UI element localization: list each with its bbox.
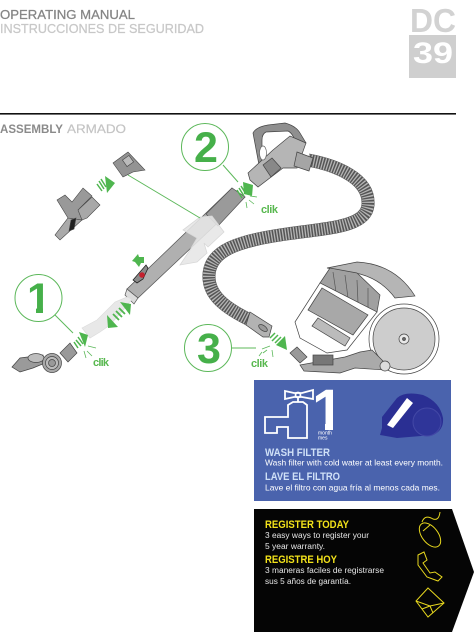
icon: phone: [418, 552, 442, 581]
hose end: [246, 312, 272, 337]
extension tube, translucent: [82, 297, 132, 338]
title: operating manual: [0, 8, 204, 36]
month label: month: [318, 430, 332, 436]
step badge 3: [184, 324, 232, 373]
register text: REGISTER TODAY: [265, 519, 350, 531]
step badge 1: 1: [27, 275, 51, 323]
wand clip, translucent: [180, 216, 224, 265]
handle: [248, 123, 313, 187]
register text: sus 5 años de garantía.: [265, 577, 351, 586]
clik labels: [93, 204, 279, 370]
wash filter text: LAVE EL FILTRO: [265, 471, 340, 483]
hose: [209, 160, 368, 321]
panel: register: [254, 509, 474, 632]
detached tool: [55, 188, 100, 240]
click marks: [84, 196, 273, 358]
wash filter text: Wash filter with cold water at least every month.: [265, 458, 443, 468]
vacuum rear arch: [327, 262, 415, 298]
model badge: DC 39: [409, 2, 456, 78]
wash filter text: Lave el filtro con agua fría al menos cada mes.: [265, 482, 440, 492]
heading: assembly: ASSEMBLY: [0, 122, 63, 136]
icon: mouse: [415, 512, 445, 551]
step badge 2: [182, 124, 228, 172]
floor tool: [12, 343, 77, 372]
clear bin: [295, 283, 377, 353]
model badge: DC 39: 39: [413, 37, 453, 70]
panel: wash filter: [254, 378, 451, 501]
step badge 1: [15, 274, 62, 323]
cyclone head: [320, 268, 380, 312]
heading: assembly: [0, 122, 126, 136]
arrow: step 3 click: [270, 333, 287, 350]
icon: vacuum with filter: [380, 394, 443, 438]
connector part: [113, 152, 145, 177]
green leader lines: [55, 165, 256, 348]
big number 1: 1: [312, 378, 344, 443]
clik labels: clik: [251, 358, 269, 370]
register text: 3 easy ways to register your: [265, 531, 369, 540]
model badge: DC 39: DC: [410, 2, 456, 39]
clik labels: clik: [93, 357, 110, 369]
clik labels: clik: [261, 204, 279, 216]
icon: tap: [265, 390, 313, 438]
wash filter text: WASH FILTER: [265, 447, 330, 459]
icon: envelope: [416, 588, 444, 617]
month label: mes: [318, 436, 328, 442]
heading: assembly: ARMADO: [67, 122, 126, 136]
step badge 3: 3: [197, 325, 221, 373]
title: operating manual: OPERATING MANUAL: [0, 8, 135, 22]
wheel: [369, 304, 439, 374]
base and front wheel: [300, 350, 385, 373]
arrow: step 2 click: [237, 182, 253, 198]
register text: 3 maneras faciles de registrarse: [265, 566, 385, 575]
arrow: extension two-way: [107, 302, 131, 328]
arrow: tool to connector: [97, 176, 115, 193]
arrow: catch up-down: [132, 254, 144, 267]
step badge 2: 2: [194, 124, 218, 172]
wand upper: [125, 188, 245, 304]
month label: [318, 430, 332, 442]
register text: REGISTRE HOY: [265, 554, 338, 566]
release catch, red: [133, 265, 148, 283]
vacuum cleaner: [290, 262, 439, 374]
arrow: step 1 click: [74, 332, 88, 348]
wash filter text: [265, 447, 443, 492]
title: operating manual: INSTRUCCIONES DE SEGURIDAD: [0, 22, 204, 36]
register text: 5 year warranty.: [265, 542, 325, 551]
register text: [265, 519, 385, 586]
